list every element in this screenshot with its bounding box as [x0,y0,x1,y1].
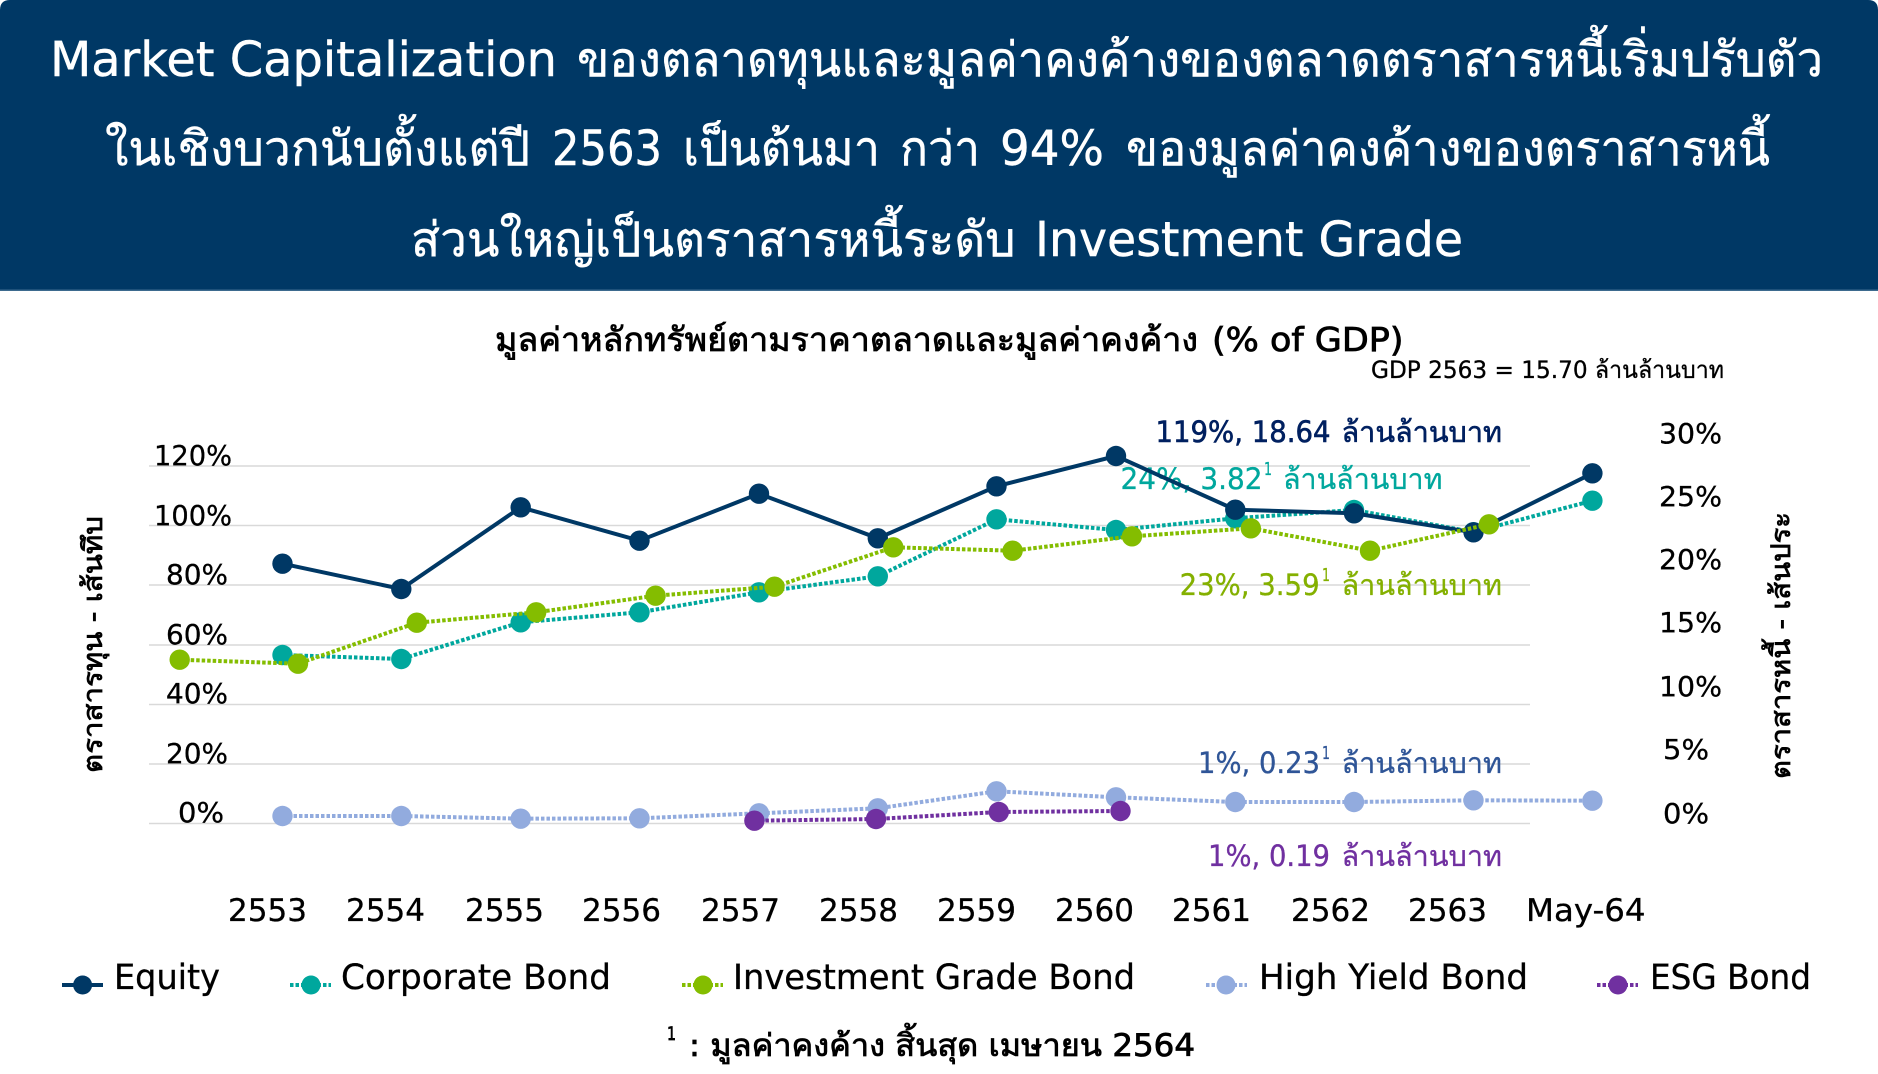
title line 2 [105,114,1770,178]
value label: high yield bond: ล้านล้านบาท [1342,746,1502,780]
title line 3: ส่วนใหญ่เป็นตราสารหนี้ระดับ [411,205,1016,268]
legend [62,958,1811,998]
value label: ESG bond: ล้านล้านบาท [1342,839,1502,873]
value label: equity [1156,415,1502,449]
value label: ESG bond: 1%, 0.19 [1208,839,1330,873]
right axis labels: 30% [1659,417,1722,450]
title line 2: เป็นต้นมา [683,120,880,177]
left axis title: ตราสารทุน - เส้นทึบ [78,516,110,773]
x axis labels: 2558 [819,893,898,929]
right axis labels: 0% [1663,797,1709,830]
value label: corporate bond: ล้านล้านบาท [1283,462,1442,496]
chart title: (% of GDP) [1212,320,1404,359]
x axis labels: 2554 [346,893,425,929]
left axis labels: 80% [166,558,228,591]
left axis labels: 60% [166,618,228,651]
x axis labels: 2563 [1408,893,1487,929]
title line 2: ในเชิงบวกนับตั้งแต่ปี [105,114,530,177]
right axis labels: 15% [1659,606,1722,639]
series: corporate bond [272,490,1603,669]
title line 2: ของมูลค่าคงค้างของตราสารหนี้ [1126,114,1770,178]
left axis labels: 40% [166,677,228,710]
value label: high yield bond: 1%, 0.23 [1198,746,1320,780]
title line 1 [50,25,1823,89]
legend item: high yield bond: High Yield Bond [1259,958,1528,998]
series: ESG bond [744,801,1131,831]
legend item: ESG bond: ESG Bond [1650,958,1811,998]
footnote: : มูลค่าคงค้าง สิ้นสุด เมษายน 2564 [689,1023,1195,1065]
x axis labels: 2559 [937,893,1016,929]
title line 2: 2563 [552,121,662,177]
x axis labels: 2557 [701,893,780,929]
legend item: equity: Equity [114,958,220,998]
series: investment grade bond [170,514,1499,674]
x axis labels [228,893,1646,929]
series: high yield bond [272,781,1603,829]
legend item: investment grade bond: Investment Grade Bond [733,958,1135,998]
left axis labels: 120% [154,439,232,472]
left axis labels: 0% [178,796,224,829]
value label: high yield bond: 1 [1322,743,1330,764]
value label: investment grade bond: ล้านล้านบาท [1342,568,1502,602]
title line 2: กว่า [900,121,980,177]
title line 3: Investment Grade [1035,212,1463,268]
value label: equity: ล้านล้านบาท [1342,415,1502,449]
series: equity [272,446,1603,599]
x axis labels: May-64 [1526,893,1646,929]
chart title: มูลค่าหลักทรัพย์ตามราคาตลาดและมูลค่าคงค้าง [495,320,1198,360]
value label: investment grade bond [1180,565,1502,602]
right axis labels: 10% [1659,670,1722,703]
value label: investment grade bond: 23%, 3.59 [1180,568,1320,602]
right axis labels: 5% [1663,733,1709,766]
left axis labels: 100% [154,499,232,532]
footnote: 1 [667,1023,676,1045]
left axis labels: 20% [166,737,228,770]
x axis labels: 2556 [582,893,661,929]
x axis labels: 2553 [228,893,307,929]
right axis labels: 20% [1659,543,1722,576]
legend item: equity [62,958,220,998]
title line 3 [411,205,1463,268]
legend item: corporate bond: Corporate Bond [341,958,611,998]
left axis labels [154,439,232,829]
right axis labels: 25% [1659,480,1722,513]
title line 1: Market Capitalization [50,32,557,88]
title line 2: 94% [1000,121,1104,177]
value label: corporate bond: 24%, 3.82 [1120,462,1262,496]
value label: high yield bond [1198,743,1502,780]
header banner [0,0,1878,291]
x axis labels: 2555 [465,893,544,929]
value label: corporate bond [1120,459,1442,496]
x axis labels: 2561 [1172,893,1251,929]
value label: equity: 119%, 18.64 [1156,415,1330,449]
value label: ESG bond [1208,839,1502,873]
title line 1: ของตลาดทุนและมูลค่าคงค้างของตลาดตราสารหนี้เริ่มปรับตัว [577,25,1823,89]
right axis title: ตราสารหนี้ - เส้นประ [1761,512,1797,779]
x axis labels: 2562 [1291,893,1370,929]
GDP note: GDP 2563 = 15.70 ล้านล้านบาท [1371,356,1724,384]
value label: investment grade bond: 1 [1322,565,1330,586]
value label: corporate bond: 1 [1264,459,1272,480]
x axis labels: 2560 [1055,893,1134,929]
right axis labels [1659,417,1722,830]
